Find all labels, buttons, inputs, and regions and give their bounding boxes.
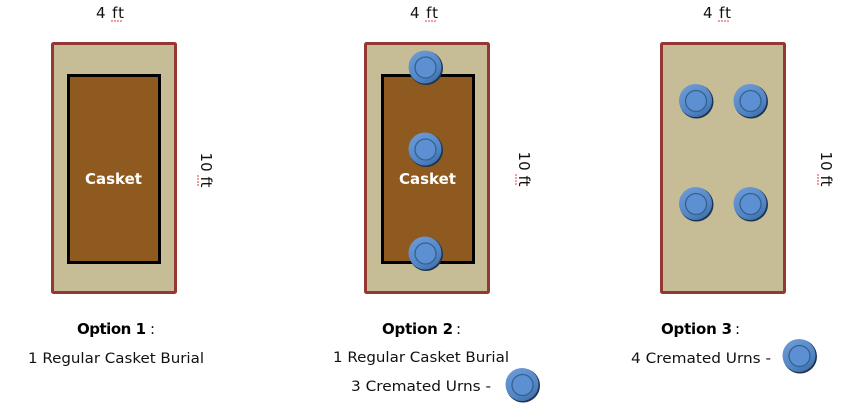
- icon: urn legend: [506, 368, 540, 402]
- caption: option 1: [28, 320, 204, 367]
- width label: 4 ft: 4 ft: [410, 4, 438, 22]
- length label: 10 ft: 10 ft: [515, 152, 533, 187]
- icon: urn bottom left: [679, 187, 714, 222]
- icon: urn bottom: [408, 236, 443, 271]
- panel: option 3 plot: [662, 4, 835, 292]
- caption: option 2: [333, 320, 540, 402]
- casket: Casket: [85, 170, 142, 188]
- width label: 4 ft: 4 ft: [96, 4, 124, 22]
- length label: 10 ft: 10 ft: [817, 152, 835, 187]
- icon: urn top left: [679, 84, 714, 118]
- text: casket burial: 1 Regular Casket Burial: [333, 350, 509, 366]
- casket: [68, 76, 160, 262]
- panel: option 1 plot: [52, 4, 215, 292]
- casket: [382, 76, 474, 262]
- heading: option 2: Option 2: [382, 320, 453, 338]
- text: casket burial: 1 Regular Casket Burial: [28, 351, 204, 367]
- burial plot: [662, 44, 784, 292]
- heading: option 3: Option 3: [661, 320, 732, 338]
- panel: option 2 plot: [366, 4, 533, 292]
- caption: option 3: [631, 320, 817, 374]
- casket: Casket: [399, 170, 456, 188]
- text: cremated urns: 4 Cremated Urns -: [631, 351, 771, 367]
- icon: urn bottom right: [734, 187, 768, 222]
- heading: option 1: Option 1: [77, 320, 146, 338]
- text: cremated urns: 3 Cremated Urns -: [351, 379, 491, 395]
- length label: 10 ft: 10 ft: [197, 152, 215, 188]
- heading: option 3: :: [735, 320, 740, 338]
- icon: urn top right: [734, 84, 768, 118]
- burial plot: [366, 44, 488, 292]
- width label: 4 ft: 4 ft: [703, 4, 731, 22]
- burial plot: [52, 44, 176, 292]
- icon: urn top: [408, 50, 443, 85]
- icon: urn middle: [408, 132, 443, 167]
- icon: urn legend: [782, 339, 817, 374]
- heading: option 1: :: [150, 320, 155, 338]
- heading: option 2: :: [456, 320, 461, 338]
